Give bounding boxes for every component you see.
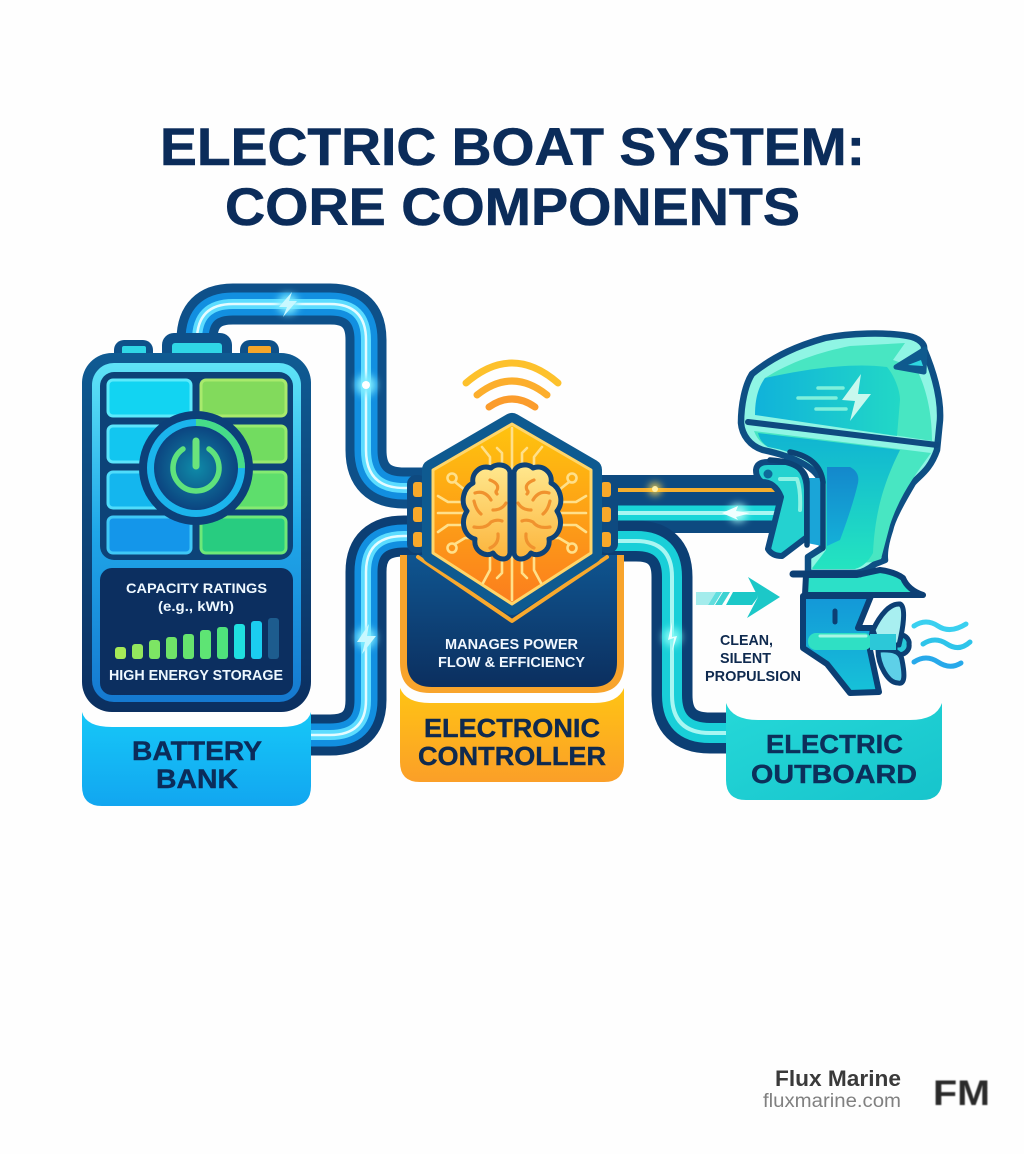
text: clean silent propulsion: SILENT xyxy=(720,650,771,667)
cowl divider xyxy=(748,422,937,445)
motor cowl green zone xyxy=(757,343,932,441)
connector: battery top to controller xyxy=(197,304,425,488)
motor mid green zone xyxy=(754,431,931,568)
label: battery bank: BANK xyxy=(156,764,239,794)
title xyxy=(160,118,865,237)
footer brand text: Flux Marine xyxy=(775,1066,901,1091)
battery cell grid xyxy=(100,372,293,560)
motor clamp bracket xyxy=(756,462,807,556)
cowl vent notch xyxy=(896,349,925,372)
label: electric outboard: OUTBOARD xyxy=(751,759,917,789)
connector: controller to outboard lower xyxy=(600,541,726,733)
logo: FM: FM xyxy=(933,1074,990,1113)
panel: capacity ratings xyxy=(100,568,293,695)
panel: battery bank xyxy=(82,333,311,712)
panel: capacity ratings: CAPACITY RATINGS xyxy=(126,580,267,596)
icon: controller hexagon xyxy=(418,424,607,621)
text: clean silent propulsion xyxy=(705,632,801,685)
bar chart: energy level xyxy=(115,618,279,659)
label: electric outboard xyxy=(726,703,942,800)
panel: electronic controller: FLOW & EFFICIENCY xyxy=(438,655,585,671)
icon: electric outboard motor xyxy=(741,334,940,693)
title: CORE COMPONENTS xyxy=(225,178,800,237)
label: electronic controller: ELECTRONIC xyxy=(424,713,600,743)
inner bracket lines xyxy=(770,452,823,548)
panel: electronic controller: MANAGES POWER xyxy=(445,637,579,653)
propeller xyxy=(870,604,909,683)
footer brand text xyxy=(763,1066,901,1112)
footer brand text: fluxmarine.com xyxy=(763,1091,901,1112)
panel: capacity ratings: HIGH ENERGY STORAGE xyxy=(109,668,283,684)
panel: electronic controller xyxy=(400,555,624,693)
icon: power button xyxy=(139,411,253,525)
motor mid panel xyxy=(758,433,900,569)
arrow: propulsion direction xyxy=(696,577,780,618)
motor blue inset xyxy=(827,467,858,546)
title: ELECTRIC BOAT SYSTEM: xyxy=(160,118,865,177)
connector: controller to outboard straight xyxy=(600,475,785,533)
label: battery bank: BATTERY xyxy=(132,736,262,766)
circuit traces xyxy=(438,428,586,600)
text: clean silent propulsion: CLEAN, xyxy=(720,632,773,649)
motor main body xyxy=(741,334,940,573)
text: clean silent propulsion: PROPULSION xyxy=(705,668,801,685)
label: electric outboard: ELECTRIC xyxy=(766,729,903,759)
icon: water waves xyxy=(914,622,970,666)
motor cowl panel xyxy=(755,365,900,436)
icon: energy sparks on battery pipes xyxy=(278,292,376,654)
panel: capacity ratings: (e.g., kWh) xyxy=(158,598,234,614)
motor lower unit xyxy=(803,596,879,693)
motor collar xyxy=(805,570,923,595)
icon: battery terminals xyxy=(114,333,279,370)
icon: connector pads xyxy=(407,475,618,553)
connector: battery bottom to controller xyxy=(311,536,425,735)
icon: wireless signal arcs xyxy=(466,363,558,407)
label: electronic controller xyxy=(400,688,624,782)
label: battery bank xyxy=(82,712,311,806)
icon: lightning bolt on cowl xyxy=(798,374,871,421)
icon: brain xyxy=(463,465,561,559)
label: electronic controller: CONTROLLER xyxy=(418,741,606,771)
